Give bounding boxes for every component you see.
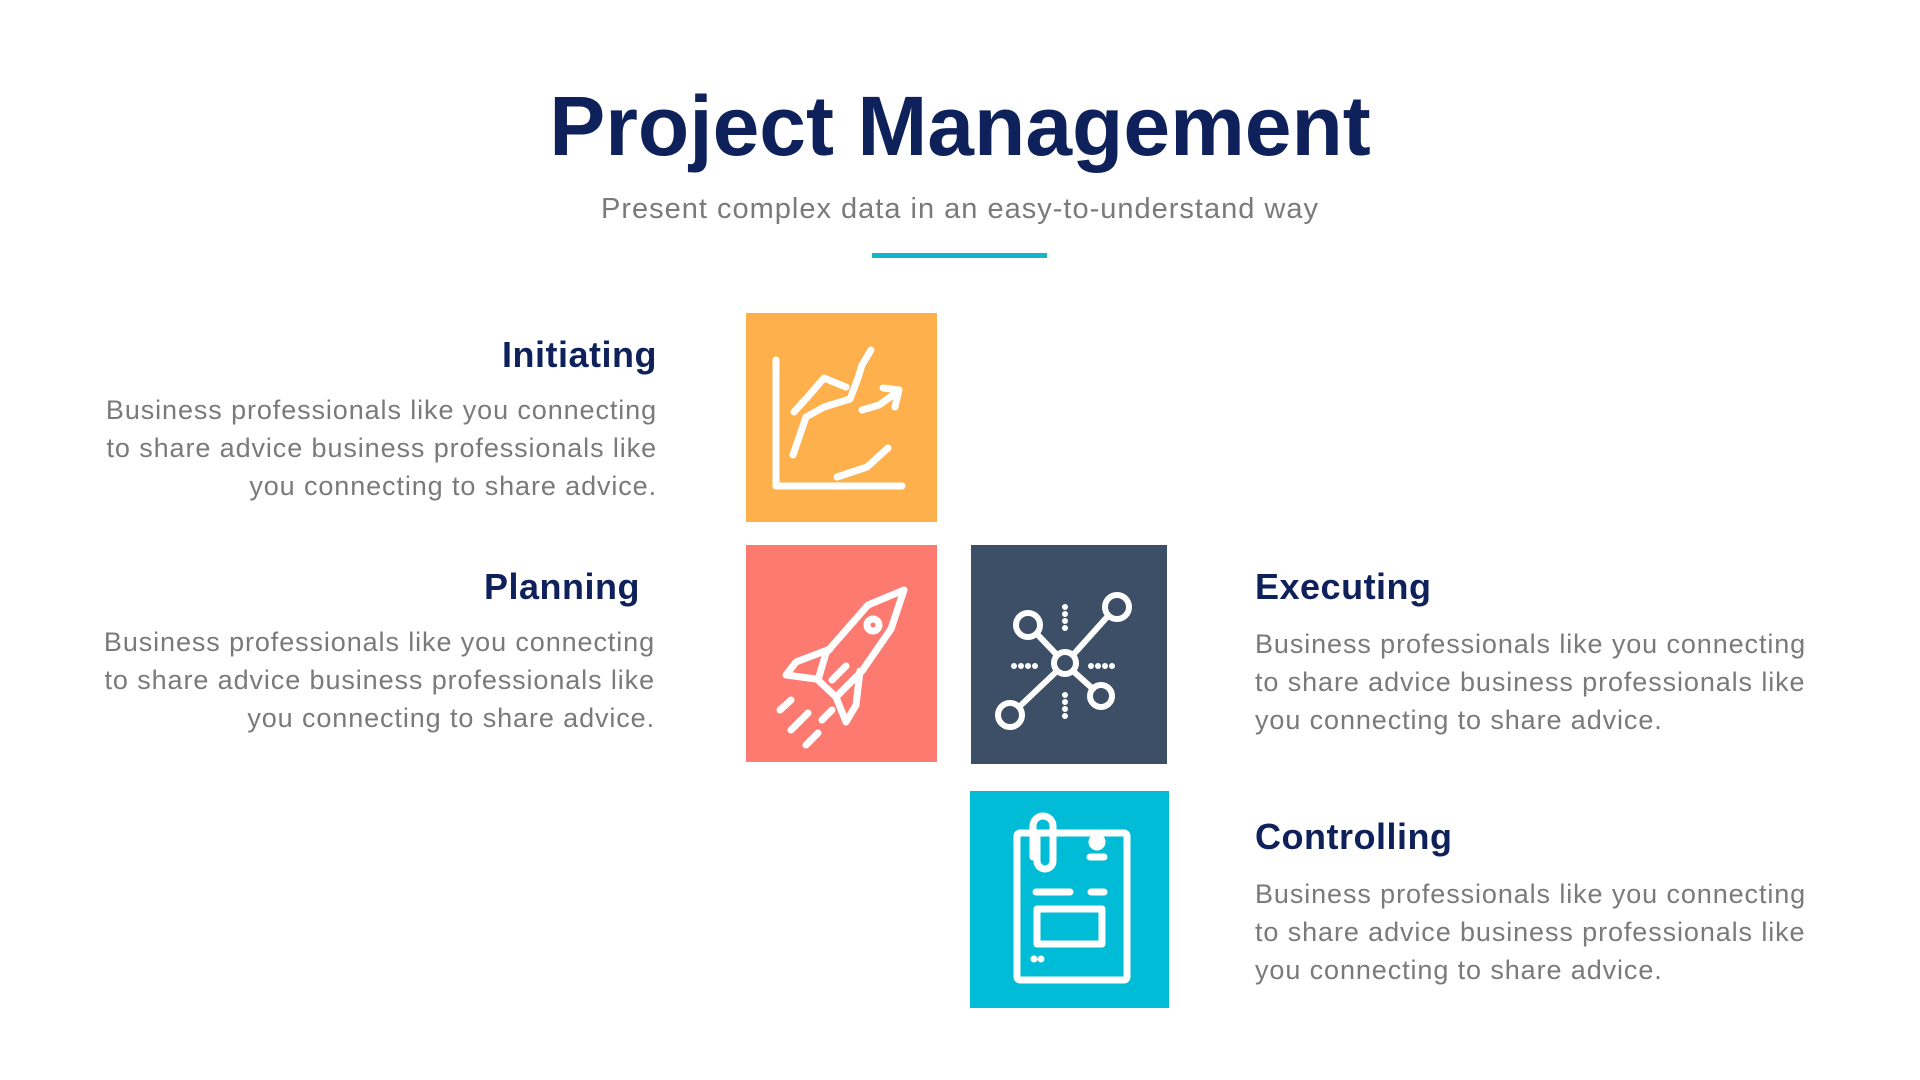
icon tile: network hub <box>971 545 1167 764</box>
subtitle: Present complex data in an easy-to-understand way <box>601 193 1319 225</box>
block: Controlling: Business professionals like you connecting <box>1255 879 1806 909</box>
icon tile: clipboard <box>970 791 1169 1008</box>
block: Initiating: you connecting to share advice. <box>249 471 657 501</box>
block: Planning: Business professionals like you connecting <box>104 627 655 657</box>
block: Controlling: Controlling <box>1255 816 1452 857</box>
block: Planning: Planning <box>484 566 640 607</box>
icon tile: rocket <box>746 545 937 762</box>
block: Executing <box>1255 566 1806 735</box>
block: Controlling <box>1255 816 1806 985</box>
block: Executing: you connecting to share advice. <box>1255 705 1663 735</box>
title: Project Management <box>549 79 1371 173</box>
block: Planning <box>104 566 655 733</box>
accent underline <box>872 253 1047 258</box>
block: Planning: you connecting to share advice. <box>247 703 655 733</box>
block: Controlling: you connecting to share advice. <box>1255 955 1663 985</box>
icon tile: growth chart <box>746 313 937 522</box>
block: Executing: Executing <box>1255 566 1432 607</box>
block: Executing: to share advice business professionals like <box>1255 667 1805 697</box>
block: Initiating <box>106 334 657 501</box>
block: Initiating: to share advice business professionals like <box>107 433 657 463</box>
block: Initiating: Initiating <box>502 334 657 375</box>
block: Controlling: to share advice business professionals like <box>1255 917 1805 947</box>
block: Initiating: Business professionals like you connecting <box>106 395 657 425</box>
block: Planning: to share advice business professionals like <box>105 665 655 695</box>
block: Executing: Business professionals like you connecting <box>1255 629 1806 659</box>
